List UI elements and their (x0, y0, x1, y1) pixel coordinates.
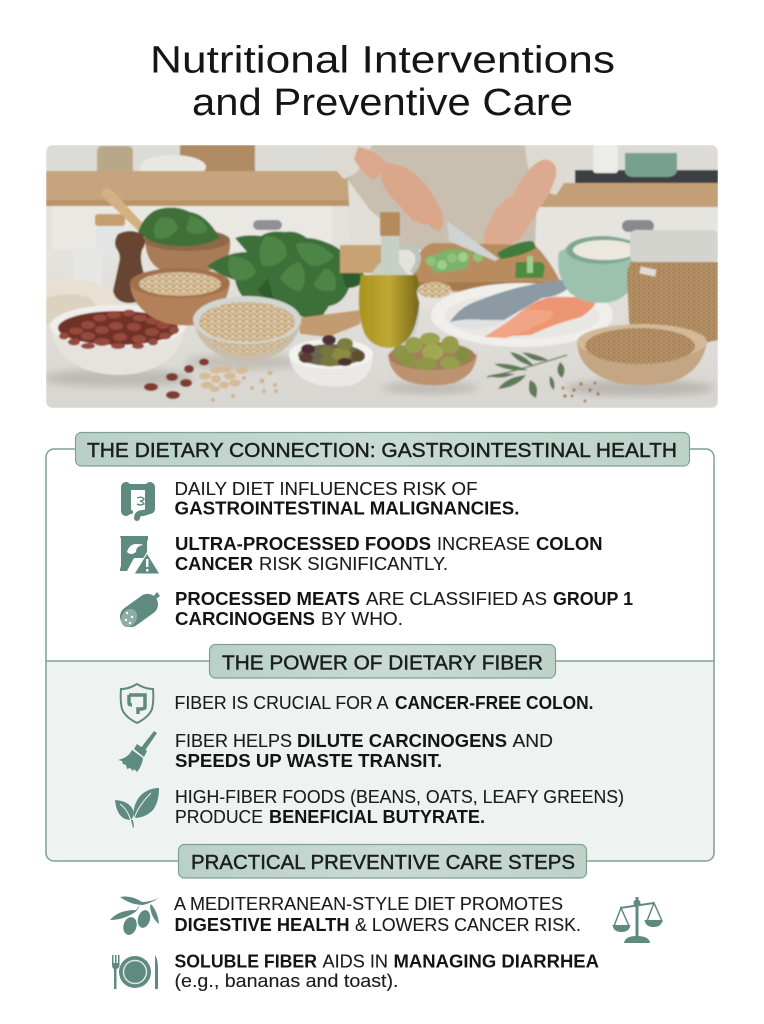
text: cancer-free colon: FIBER IS CRUCIAL FOR A (174, 693, 388, 713)
text: ultra-processed foods: ULTRA-PROCESSED FOODS (175, 534, 431, 554)
icon: olive branch (110, 897, 159, 936)
text: ultra-processed foods: RISK SIGNIFICANTLY. (259, 554, 448, 574)
text: daily diet (174, 479, 520, 518)
icon: leaves (115, 788, 159, 828)
spoon (102, 188, 143, 232)
table surface (46, 250, 718, 408)
small bowl of grain (416, 281, 453, 302)
text: dilute carcinogens (175, 731, 553, 771)
icon: balance scale (612, 897, 662, 943)
text: high-fiber foods: PRODUCE (175, 807, 263, 827)
icon: shield with colon (121, 684, 153, 723)
text: dilute carcinogens: DILUTE CARCINOGENS (297, 731, 507, 751)
text: mediterranean diet: A MEDITERRANEAN-STYLE DIET PROMOTES (174, 894, 563, 914)
olive sprig (487, 352, 567, 398)
pepper mill (113, 231, 148, 303)
wooden bowl with spinach (138, 208, 230, 274)
heading: the power of dietary fiber: THE POWER OF DIETARY FIBER (222, 652, 543, 674)
panel: dietary fiber (46, 644, 714, 861)
text: processed meats (175, 589, 633, 629)
icon: snack bag with warning (120, 536, 160, 574)
text: soluble fiber: (e.g., bananas and toast). (174, 971, 398, 991)
kitchen background (46, 145, 718, 257)
spinach pile (207, 232, 367, 320)
text: processed meats: BY WHO. (321, 609, 403, 629)
heading: the power of dietary fiber (210, 644, 556, 678)
text: mediterranean diet: DIGESTIVE HEALTH (174, 915, 350, 935)
glass bowl of oats (193, 296, 302, 361)
bowl of kidney beans (50, 305, 186, 375)
text: high-fiber foods: BENEFICIAL BUTYRATE. (269, 807, 485, 827)
title (150, 40, 615, 124)
cucumber slices and knife (423, 221, 545, 278)
panel: practical preventive care (110, 844, 662, 991)
wood bowl of oats (130, 268, 230, 326)
title: Nutritional Interventions (150, 40, 615, 82)
text: processed meats: CARCINOGENS (175, 609, 315, 629)
icon: broom (118, 731, 157, 772)
text: daily diet: GASTROINTESTINAL MALIGNANCIES. (174, 498, 520, 518)
title: and Preventive Care (192, 82, 573, 124)
text: mediterranean diet (174, 894, 581, 935)
text: ultra-processed foods: INCREASE (437, 534, 530, 554)
heading: practical preventive care steps: PRACTICAL PREVENTIVE CARE STEPS (191, 852, 575, 874)
text: cancer-free colon (174, 693, 594, 713)
scattered beans and oats (144, 358, 600, 402)
plate with fish and salmon (431, 280, 613, 347)
glass jar of grains (627, 230, 718, 344)
icon: fork plate knife (112, 955, 158, 989)
text: soluble fiber: MANAGING DIARRHEA (394, 952, 599, 972)
mint bowl with flour (558, 236, 638, 303)
text: high-fiber foods (175, 787, 624, 827)
text: ultra-processed foods (175, 534, 602, 574)
heading: the dietary connection (76, 432, 690, 466)
person with apron and hands (336, 145, 564, 250)
icon: sausage (116, 590, 162, 631)
icon: intestine (124, 487, 150, 518)
text: dilute carcinogens: SPEEDS UP WASTE TRANSIT. (175, 751, 442, 771)
text: dilute carcinogens: FIBER HELPS (175, 731, 292, 751)
text: ultra-processed foods: COLON (536, 534, 602, 554)
bowl of dark olives (289, 335, 373, 386)
olive oil bottle (359, 212, 421, 348)
text: mediterranean diet: & LOWERS CANCER RISK. (355, 915, 581, 935)
towel and small jars (46, 214, 125, 326)
panel: gastrointestinal health (46, 432, 714, 661)
photo: healthy foods on a kitchen counter (43, 145, 718, 408)
text: cancer-free colon: CANCER-FREE COLON. (395, 693, 594, 713)
text: ultra-processed foods: CANCER (175, 554, 253, 574)
text: daily diet: DAILY DIET INFLUENCES RISK OF (174, 479, 478, 499)
heading: practical preventive care steps (178, 844, 586, 878)
text: high-fiber foods: HIGH-FIBER FOODS (BEANS, OATS, LEAFY GREENS) (175, 787, 624, 807)
heading: the dietary connection: THE DIETARY CONNECTION: GASTROINTESTINAL HEALTH (87, 440, 677, 462)
text: soluble fiber: SOLUBLE FIBER (174, 952, 317, 972)
text: processed meats: GROUP 1 (553, 589, 633, 609)
text: processed meats: PROCESSED MEATS (175, 589, 360, 609)
text: soluble fiber: AIDS IN (322, 952, 388, 972)
bowl of grain (577, 324, 707, 385)
text: processed meats: ARE CLASSIFIED AS (366, 589, 547, 609)
text: soluble fiber (174, 952, 599, 991)
bowl of green olives (388, 332, 477, 385)
boards (298, 243, 560, 337)
text: dilute carcinogens: AND (512, 731, 553, 751)
